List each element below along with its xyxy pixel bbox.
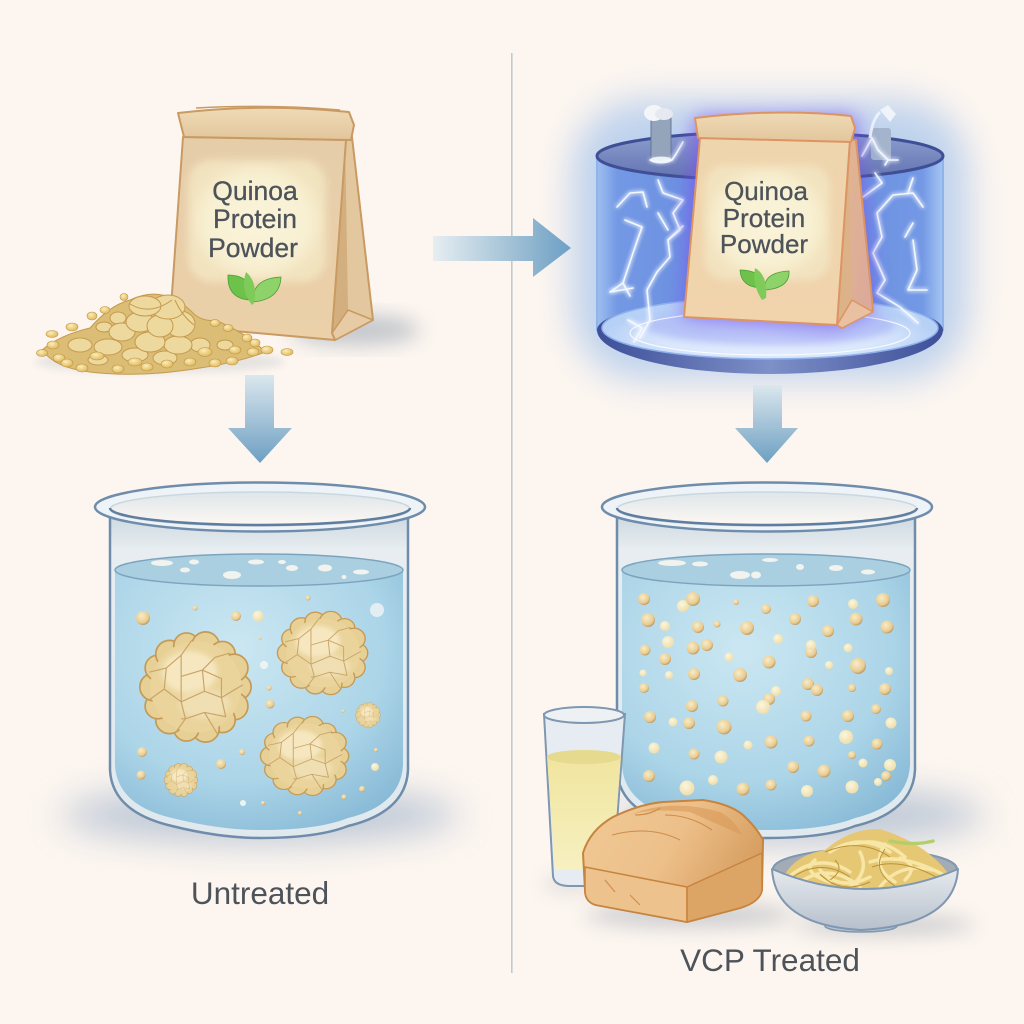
electrode right [870, 105, 896, 160]
noodle bowl [772, 829, 958, 932]
center divider [511, 53, 513, 973]
treated quinoa bag [684, 112, 873, 328]
quinoa protein bag [170, 106, 373, 340]
electrode left [644, 105, 673, 164]
bowl front [772, 869, 958, 930]
treated leaf icon [740, 268, 789, 300]
panel: untreated [35, 106, 460, 911]
bread lower side [687, 853, 762, 922]
quinoa bag shadow [290, 315, 420, 345]
label: VCP treated: VCP Treated [680, 942, 860, 978]
small particles [136, 596, 384, 815]
surface particles [151, 560, 369, 579]
milk [547, 757, 621, 870]
chamber base [597, 297, 943, 374]
treated beaker shadow [615, 787, 985, 843]
label: untreated: Untreated [191, 875, 329, 911]
leaf icon [228, 272, 281, 305]
bag label text: Protein [213, 204, 297, 234]
panel: VCP treated [542, 100, 985, 978]
treated bag label text: Quinoa [724, 176, 808, 206]
dispersed particles [638, 592, 896, 797]
bread loaf [583, 800, 763, 922]
lightning [610, 138, 927, 342]
glass of plant milk [544, 707, 625, 886]
garnish [890, 841, 933, 844]
arrow: to VCP treatment [433, 218, 571, 277]
quinoa grain pile [35, 294, 293, 374]
untreated beaker [95, 482, 425, 838]
plasma glow halo [572, 100, 968, 380]
arrow: down to treated beaker [735, 385, 798, 463]
rim [95, 482, 425, 532]
purple bag glow [684, 115, 873, 328]
treated rim [602, 482, 932, 532]
noodles [784, 829, 948, 892]
bag label text: Powder [208, 233, 298, 263]
plasma chamber [597, 105, 943, 374]
bread lower front [585, 867, 687, 922]
treated surface particles [658, 558, 875, 579]
protein clumps [140, 611, 380, 797]
food shadows [542, 879, 975, 935]
arrow: down to untreated beaker [228, 375, 292, 463]
treated beaker [602, 482, 932, 838]
treated bag label text: Powder [720, 229, 808, 259]
treated bag label text: Protein [723, 203, 805, 233]
bag label text: Quinoa [212, 176, 298, 206]
chamber lid [597, 132, 943, 180]
beaker shadow [60, 787, 460, 843]
